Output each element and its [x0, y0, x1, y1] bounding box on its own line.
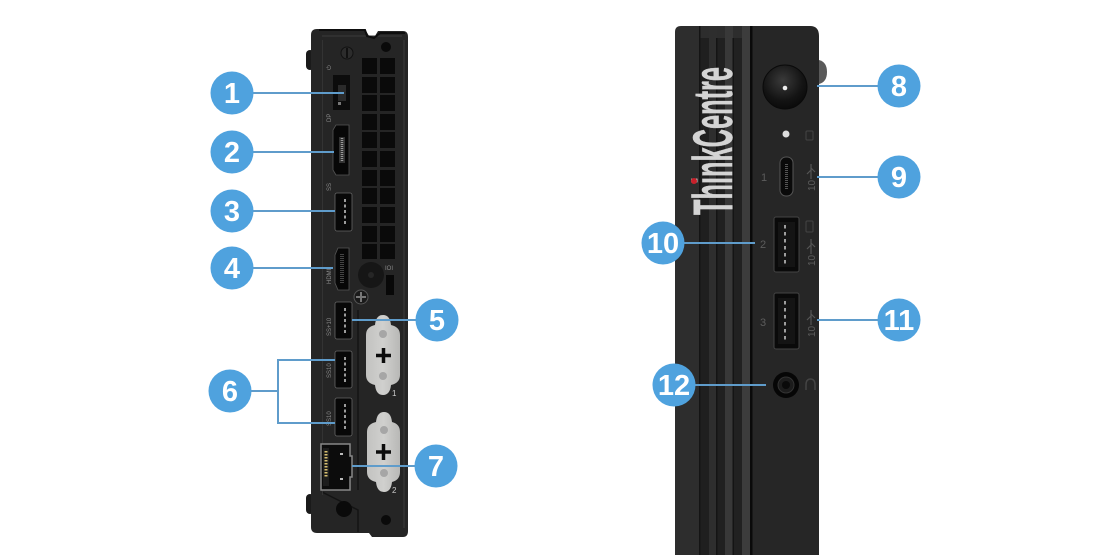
- USB-A port 2: 2: [760, 239, 766, 251]
- USB port 6b: SS10: [327, 411, 333, 426]
- Ethernet port: [321, 444, 352, 490]
- USB-A port 2: 10: [807, 254, 818, 266]
- USB port 6b: [327, 398, 352, 436]
- side foot: [819, 60, 827, 84]
- callout 8: 8: [891, 71, 907, 103]
- USB-A port 3: 10: [807, 325, 818, 337]
- ventilation grille: [362, 58, 395, 259]
- USB port 3: [327, 183, 352, 231]
- thumbscrew and security slot: IOI: [385, 266, 393, 272]
- callout 5: 5: [429, 305, 445, 337]
- expansion plate 2: [367, 412, 400, 495]
- callout 10: 10: [647, 228, 679, 260]
- callout 10: [642, 222, 755, 264]
- power button: [763, 65, 807, 109]
- USB-A port 3: 3: [760, 317, 766, 329]
- USB port 5: [327, 302, 352, 339]
- callout 6: [208, 360, 335, 423]
- front view of PC: [675, 26, 827, 555]
- USB port 3: SS: [327, 183, 333, 191]
- USB port 5: SS+10: [327, 317, 333, 336]
- callout 3: [210, 190, 335, 232]
- front ribbed panel: [675, 26, 751, 555]
- callout 3: 3: [224, 196, 240, 228]
- status LED and drive icon: [782, 130, 813, 140]
- USB-A port 3: [760, 293, 818, 349]
- callout 6: 6: [222, 376, 238, 408]
- callout 2: 2: [224, 137, 240, 169]
- rear rubber feet: [306, 50, 314, 514]
- USB-C port 1: 10: [807, 179, 818, 191]
- callout 9: [817, 156, 920, 198]
- callout 8: [817, 64, 920, 108]
- HDMI port: HDMI: [327, 268, 333, 284]
- front face panel: [751, 26, 819, 555]
- USB port 6a: [327, 351, 352, 388]
- power port: [326, 65, 350, 110]
- audio jack: [773, 372, 815, 398]
- power port: ⏻: [326, 65, 333, 70]
- USB-A port 2: [760, 217, 818, 272]
- expansion plate 1: 1: [392, 389, 397, 398]
- callout 12: 12: [658, 370, 690, 402]
- rear view of PC: [306, 29, 408, 537]
- DisplayPort: [327, 114, 349, 175]
- callout 2: [210, 130, 334, 174]
- HDMI port: [327, 248, 349, 290]
- callout 11: [817, 298, 920, 342]
- callout 4: [210, 246, 333, 290]
- USB-C port 1: [761, 157, 818, 196]
- callout 1: 1: [224, 78, 240, 110]
- callout 12: [652, 364, 766, 406]
- callout 7: [352, 444, 458, 488]
- callout 5: [352, 298, 458, 342]
- callout 9: 9: [891, 162, 907, 194]
- callout 7: 7: [428, 451, 444, 483]
- USB-C port 1: 1: [761, 172, 767, 184]
- top holes: [336, 42, 391, 525]
- ThinkCentre logo: [681, 67, 744, 215]
- thumbscrew and security slot: [354, 262, 394, 304]
- callout 4: 4: [224, 253, 240, 285]
- callout 11: 11: [884, 305, 914, 337]
- expansion plate 1: [366, 315, 400, 398]
- USB port 6a: SS10: [327, 363, 333, 378]
- DisplayPort: DP: [327, 114, 333, 122]
- expansion plate 2: 2: [392, 486, 397, 495]
- callout 1: [210, 72, 344, 114]
- rear chassis: [311, 29, 408, 537]
